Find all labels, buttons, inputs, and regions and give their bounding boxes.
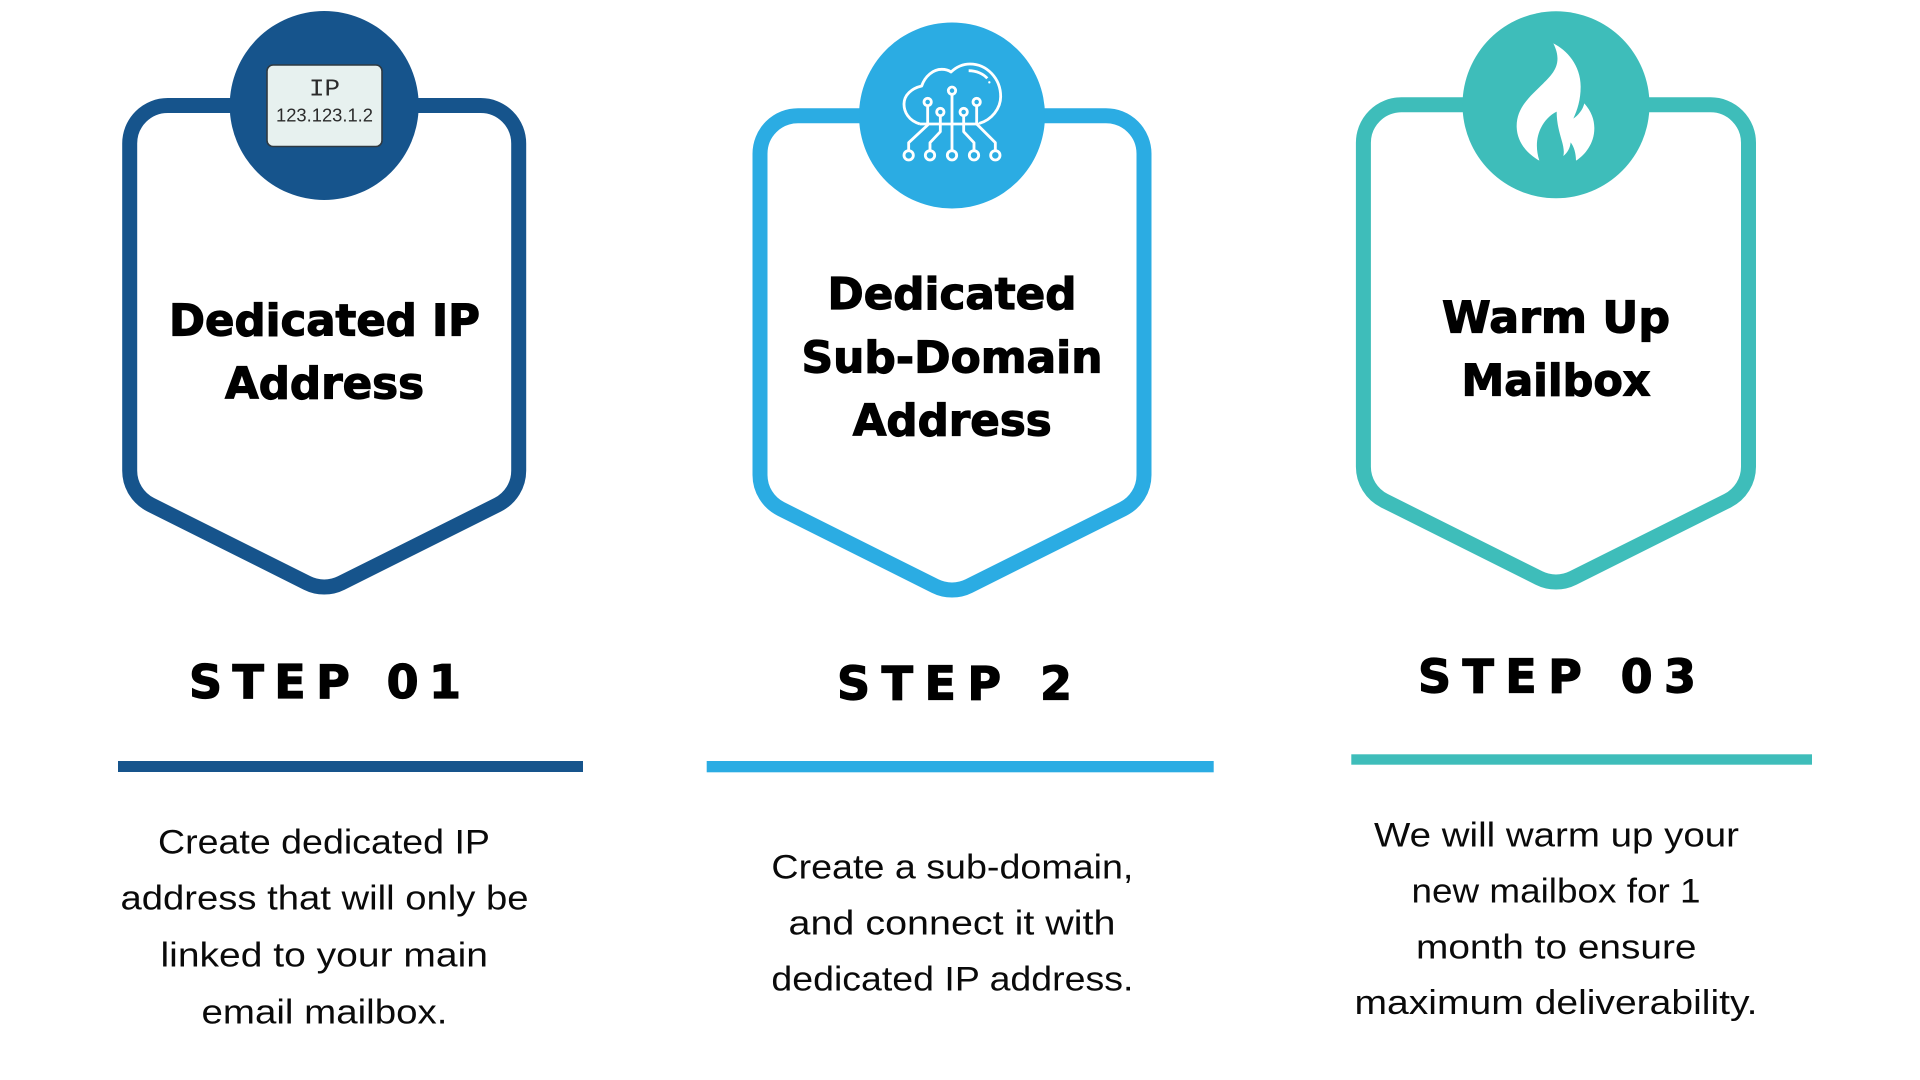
heading 1: Address [225, 358, 424, 409]
description 3: maximum deliverability. [1354, 984, 1758, 1022]
rule 3 [1351, 754, 1812, 765]
heading 1: Dedicated IP [169, 296, 480, 347]
description 3: month to ensure [1416, 928, 1696, 966]
panel: step 2 dedicated sub-domain [707, 22, 1214, 998]
rule 1 [118, 761, 583, 772]
heading 3: Warm Up [1442, 292, 1670, 343]
heading 3 [1442, 292, 1670, 407]
description 2: and connect it with [788, 904, 1116, 942]
description 1: Create dedicated IP [158, 824, 490, 862]
heading 2 [802, 269, 1102, 447]
description 1 [120, 824, 528, 1031]
icon: IP address card [267, 65, 382, 146]
shield outline 1 [130, 106, 519, 587]
heading 3: Mailbox [1462, 356, 1650, 407]
icon circle 1 [230, 11, 419, 200]
step label 1: STEP 01 [189, 655, 461, 709]
icon circle 3 [1462, 11, 1650, 198]
heading 2: Dedicated [828, 269, 1076, 320]
heading 2: Sub-Domain [802, 333, 1102, 384]
panel: step 3 warm up mailbox [1351, 11, 1812, 1022]
shield outline 3 [1363, 105, 1748, 582]
icon: cloud circuit [904, 64, 1001, 160]
step label 2: STEP 2 [837, 656, 1072, 710]
heading 2: Address [853, 396, 1052, 447]
rule 2 [707, 761, 1214, 772]
step label 3: STEP 03 [1418, 649, 1696, 703]
icon: flame [1517, 43, 1594, 161]
description 2: Create a sub-domain, [771, 848, 1133, 886]
description 1: address that will only be [120, 880, 528, 918]
description 2 [771, 848, 1133, 998]
description 1: linked to your main [160, 937, 488, 975]
description 2: dedicated IP address. [771, 960, 1133, 998]
icon: IP address card: IP [309, 77, 340, 104]
description 3: new mailbox for 1 [1412, 872, 1700, 910]
icon: IP address card: 123.123.1.2 [276, 105, 373, 126]
icon circle 2 [859, 22, 1045, 208]
description 1: email mailbox. [202, 993, 448, 1031]
panel: step 1 dedicated IP [118, 11, 583, 1031]
description 3: We will warm up your [1374, 816, 1739, 854]
shield outline 2 [760, 116, 1144, 590]
description 3 [1354, 816, 1758, 1022]
heading 1 [169, 296, 480, 409]
